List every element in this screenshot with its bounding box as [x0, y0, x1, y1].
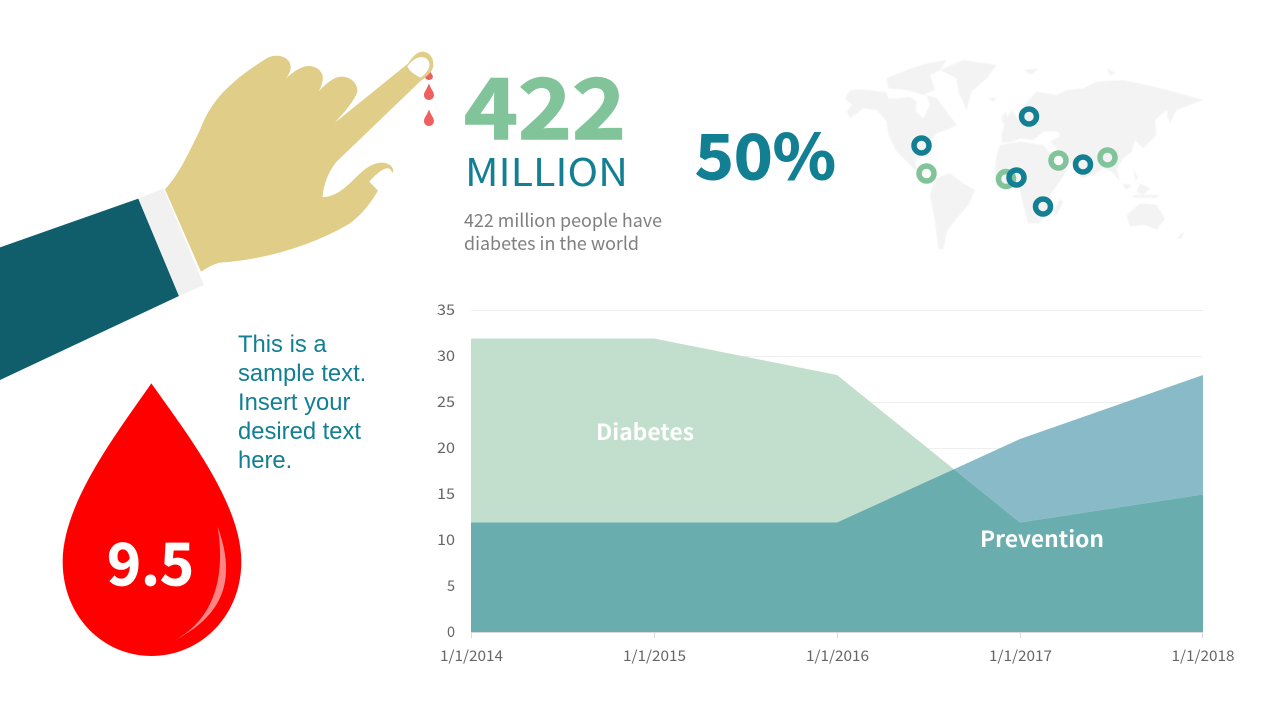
- thumbnail: [369, 168, 392, 191]
- y axis labels: 15: [437, 483, 455, 504]
- x axis with ticks: [471, 632, 1203, 638]
- prevention series label: Prevention: [980, 522, 1104, 554]
- world map: [845, 60, 1203, 250]
- gridlines: [471, 310, 1203, 586]
- area chart: [437, 299, 1234, 666]
- sample text: here.: [238, 447, 292, 474]
- statistic 50 percent: 50%: [695, 107, 836, 197]
- y axis labels: 35: [437, 299, 455, 320]
- description text: [464, 207, 662, 256]
- blood drops from fingertip: [424, 68, 434, 126]
- sample text: This is a: [238, 331, 327, 358]
- x axis labels: 1/1/2017: [989, 645, 1052, 666]
- diabetes series label: Diabetes: [596, 415, 694, 447]
- sample text: desired text: [238, 418, 361, 445]
- map markers: [914, 109, 1115, 214]
- headline statistic 422: 422: [464, 43, 626, 164]
- blood drop with value: [63, 383, 241, 656]
- y axis labels: 0: [447, 621, 455, 642]
- description text: 422 million people have: [464, 207, 662, 233]
- sample text: Insert your: [238, 389, 350, 416]
- y axis labels: 25: [437, 391, 455, 412]
- sleeve: [0, 199, 179, 380]
- diabetes area: [471, 338, 954, 522]
- description text: diabetes in the world: [464, 230, 639, 256]
- drop shape: [63, 383, 241, 656]
- sample text: sample text.: [238, 360, 366, 387]
- y axis labels: [437, 299, 455, 642]
- hand and arm illustration: [0, 52, 434, 380]
- y axis labels: 10: [437, 529, 455, 550]
- y axis labels: 5: [447, 575, 455, 596]
- y axis labels: 20: [437, 437, 455, 458]
- drop value: 9.5: [107, 518, 194, 602]
- x axis labels: 1/1/2018: [1172, 645, 1234, 666]
- overlap area: [471, 469, 1203, 632]
- y axis labels: 30: [437, 345, 455, 366]
- x axis labels: 1/1/2015: [623, 645, 686, 666]
- index fingernail: [407, 57, 429, 78]
- shirt cuff: [138, 188, 204, 296]
- x axis labels: 1/1/2016: [806, 645, 869, 666]
- x axis labels: 1/1/2014: [440, 645, 503, 666]
- headline unit million: MILLION: [465, 142, 628, 197]
- sample text: [238, 331, 366, 474]
- hand: [165, 52, 433, 272]
- prevention area: [954, 375, 1203, 522]
- x axis labels: [440, 645, 1234, 666]
